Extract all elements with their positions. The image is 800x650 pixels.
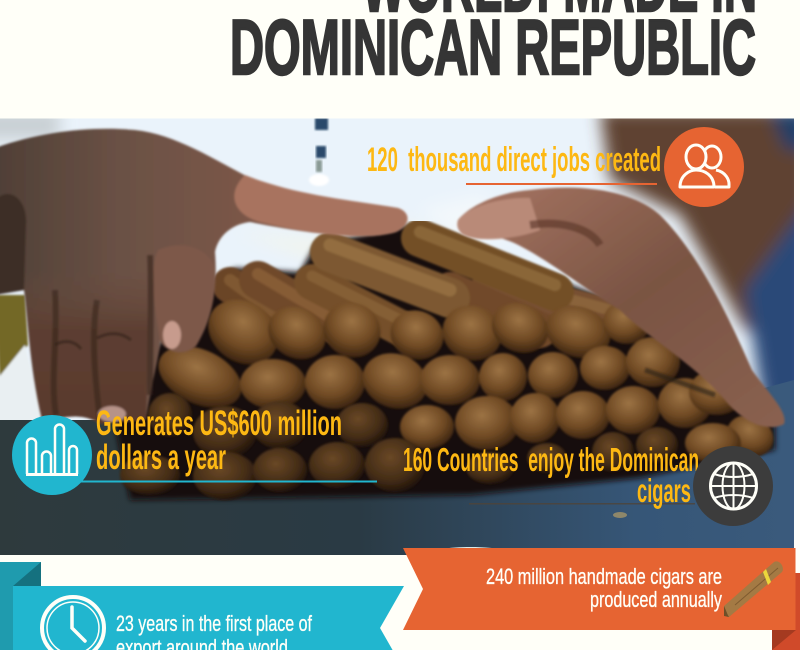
darker lower cigar row — [120, 393, 678, 500]
ribbon: 240 million cigars — [403, 548, 800, 650]
shadow beneath cigar stack — [110, 225, 775, 500]
icon: clock — [42, 597, 104, 650]
left hand — [0, 129, 408, 424]
stat: 120 thousand jobs — [367, 127, 744, 207]
cigar ends — [158, 300, 774, 462]
icon: cigar — [724, 561, 783, 617]
stat: 160 countries — [403, 441, 773, 526]
icon: bars — [26, 424, 78, 474]
olive patch and white cloth on the left — [0, 293, 39, 420]
stat: US$600 million — [12, 404, 377, 495]
photo: hands arranging cigars — [0, 110, 800, 556]
long top cigars — [230, 232, 630, 338]
stat: US$600 million: Generates US$600 million — [96, 404, 342, 443]
ribbon: 23 years in first place: 23 years in the first place of — [116, 611, 313, 636]
stat: 160 countries: cigars — [637, 472, 691, 509]
icon: globe — [710, 463, 756, 509]
ribbon: 23 years in first place — [0, 562, 404, 650]
icon: people — [680, 145, 729, 187]
table surface — [0, 380, 794, 556]
stat: US$600 million: dollars a year — [96, 438, 226, 477]
ribbon: 240 million cigars: 240 million handmade cigars are — [486, 564, 722, 589]
right hand — [457, 188, 785, 427]
ribbon: 240 million cigars: produced annually — [590, 587, 722, 612]
